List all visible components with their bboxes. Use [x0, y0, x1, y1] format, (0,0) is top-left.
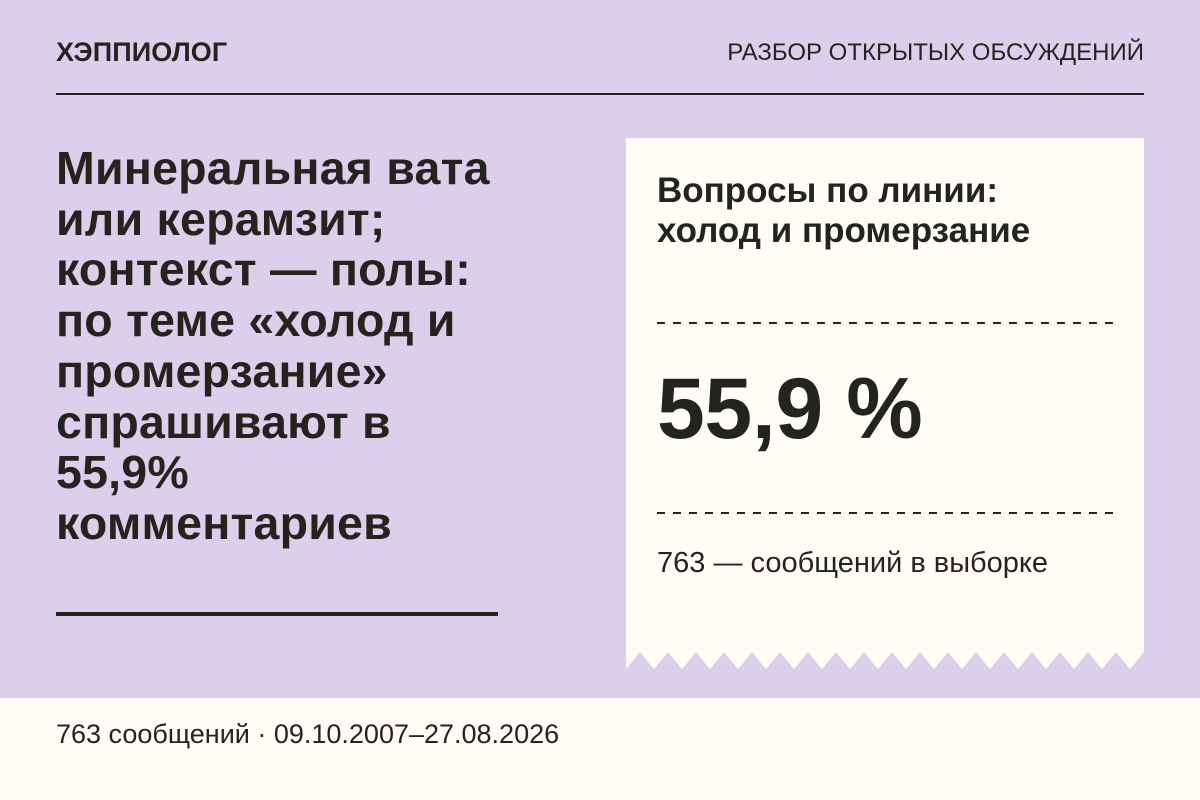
brand name: ХЭППИОЛОГ	[56, 37, 227, 67]
main headline: комментариев	[56, 497, 392, 549]
main headline: 55,9%	[56, 446, 189, 498]
headline underline	[56, 612, 498, 616]
header caption: РАЗБОР ОТКРЫТЫХ ОБСУЖДЕНИЙ	[727, 39, 1144, 66]
main headline: Минеральная вата	[56, 142, 490, 194]
main headline: контекст — полы:	[56, 243, 471, 295]
main headline: спрашивают в	[56, 396, 391, 448]
main headline: промерзание»	[56, 345, 388, 397]
dashed divider bottom	[657, 512, 1113, 514]
footer text: 763 сообщений · 09.10.2007–27.08.2026	[56, 719, 559, 749]
card heading: Вопросы по линии:	[657, 171, 998, 210]
main headline: по теме «холод и	[56, 294, 456, 346]
footer band	[0, 698, 1200, 800]
card heading: холод и промерзание	[657, 211, 1030, 250]
dashed divider top	[657, 322, 1113, 324]
sample size note: 763 — сообщений в выборке	[657, 547, 1048, 579]
header rule	[56, 93, 1144, 95]
panel: receipt card	[626, 138, 1144, 669]
card heading	[657, 171, 1030, 250]
big percentage: 55,9 %	[657, 361, 922, 457]
main headline	[56, 142, 490, 549]
main headline: или керамзит;	[56, 193, 386, 245]
